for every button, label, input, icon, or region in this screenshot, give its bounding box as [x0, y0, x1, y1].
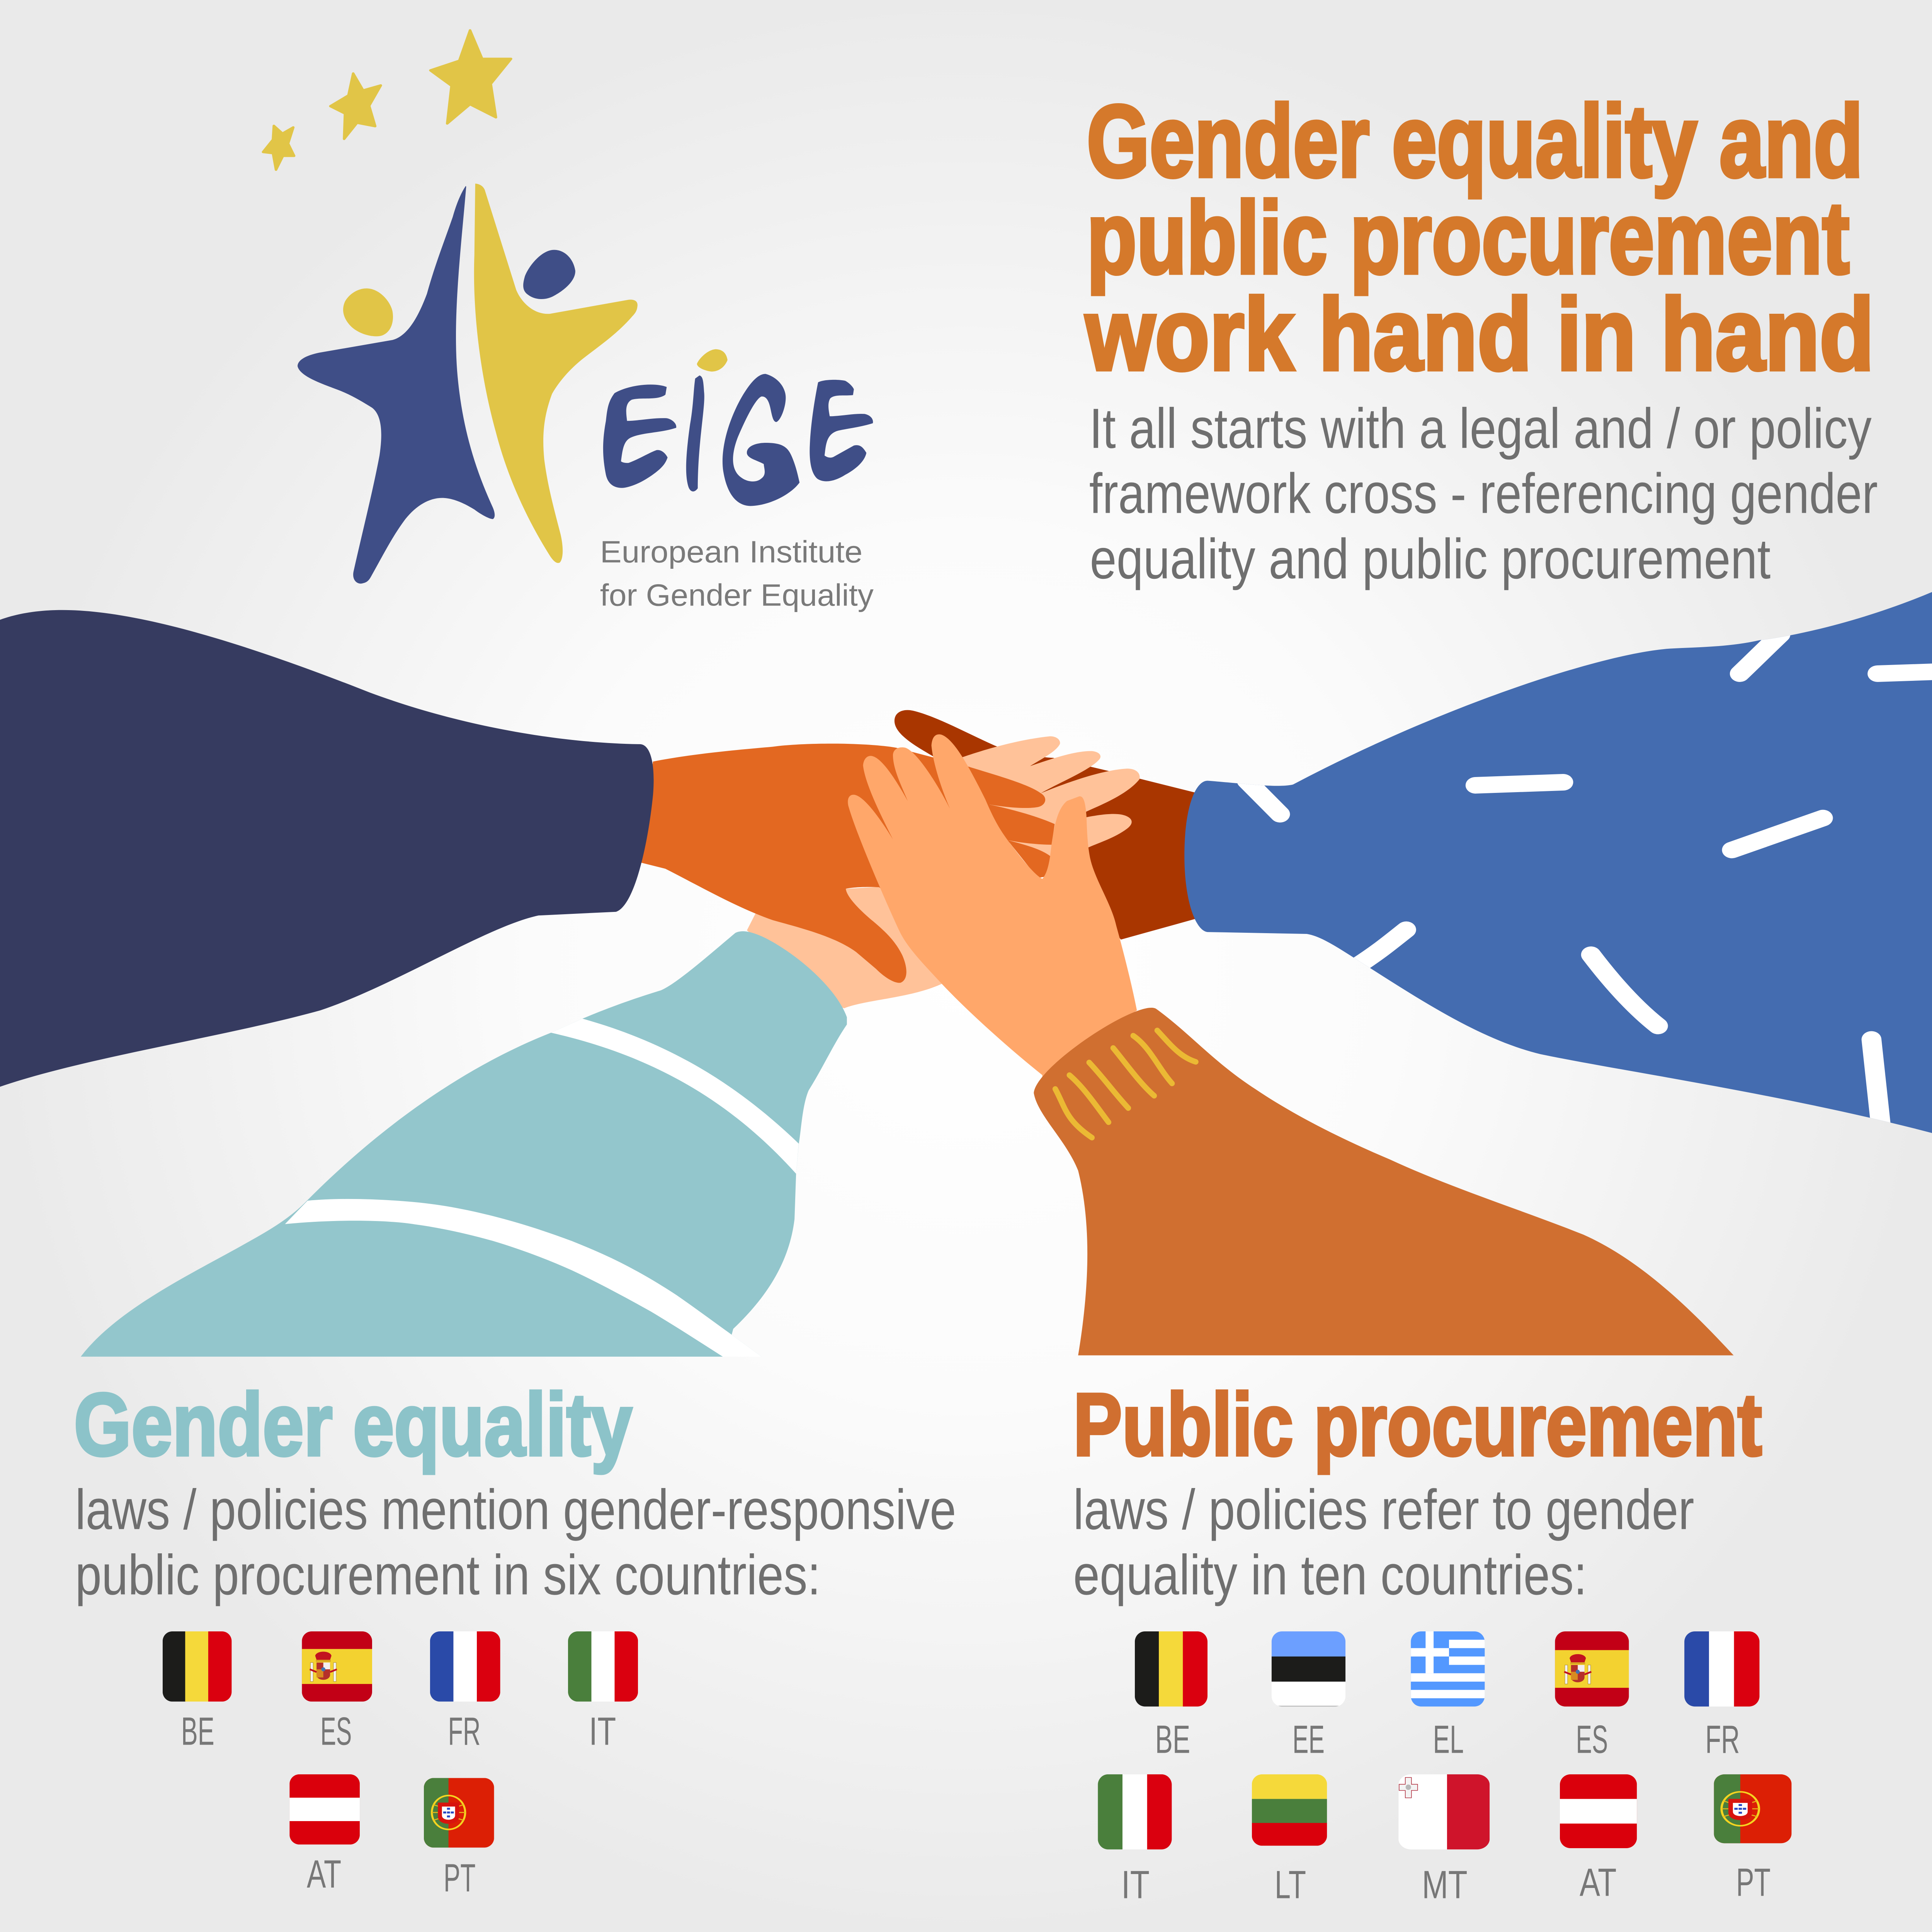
illustration: joined hands [0, 592, 1932, 1357]
logo: EIGE [263, 30, 874, 612]
flag: BE [1135, 1631, 1208, 1761]
text block: public procurement: laws / policies refer to gender [1073, 1478, 1694, 1541]
flag: FR [1684, 1631, 1760, 1761]
flag: EE: EE [1293, 1717, 1325, 1761]
title [1084, 84, 1874, 392]
flag: LT: LT [1275, 1863, 1306, 1907]
flag: IT [1098, 1774, 1172, 1907]
flag: MT: MT [1422, 1863, 1468, 1907]
logo caption [600, 535, 874, 612]
sleeve: blue [1184, 592, 1932, 1133]
logo caption: European Institute [600, 535, 862, 569]
icon: EIGE lettering [603, 349, 873, 506]
panel: public procurement [1073, 1375, 1791, 1907]
flag: ES: ES [320, 1709, 352, 1753]
icon: three stars [263, 30, 511, 170]
heading: gender equality: Gender equality [74, 1375, 632, 1474]
logo caption: for Gender Equality [600, 578, 874, 612]
sleeve: teal [81, 931, 847, 1357]
icon: EIGE figures [298, 184, 638, 583]
heading: public procurement: Public procurement [1073, 1375, 1762, 1474]
sleeve: brown-orange [1034, 1008, 1734, 1355]
flag: EE [1272, 1631, 1345, 1761]
text block: gender equality: laws / policies mention gender-responsive [75, 1478, 956, 1541]
flag: PT: PT [444, 1856, 476, 1900]
text block: gender equality: public procurement in six countries: [75, 1543, 821, 1607]
flag: BE [163, 1631, 231, 1753]
flag: EL [1411, 1631, 1485, 1761]
sleeve: navy [0, 610, 654, 1087]
flag: BE: BE [1155, 1717, 1190, 1761]
flag: AT: AT [1580, 1860, 1617, 1904]
flag: FR [430, 1631, 500, 1753]
flag: PT [1714, 1774, 1791, 1904]
text block: gender equality [75, 1478, 956, 1607]
flag: IT: IT [1121, 1863, 1150, 1907]
text block: public procurement: equality in ten countries: [1073, 1543, 1587, 1607]
flag: IT [568, 1631, 638, 1753]
hand: front peach [848, 734, 1137, 1077]
flag: LT [1252, 1774, 1327, 1907]
flag: MT [1398, 1774, 1490, 1907]
cuff stitches [1055, 1031, 1196, 1138]
flag: ES: ES [1576, 1717, 1608, 1761]
hand: light peach [747, 736, 1140, 1008]
flag: AT [1560, 1774, 1637, 1904]
flag: PT [424, 1778, 494, 1900]
flag: EL: EL [1433, 1717, 1464, 1761]
flag: BE: BE [181, 1709, 214, 1753]
flag: IT: IT [589, 1709, 616, 1753]
subtitle [1089, 397, 1878, 591]
flag: ES [1555, 1631, 1629, 1761]
flag: AT [289, 1774, 360, 1896]
flag: ES [302, 1631, 372, 1753]
flag: FR: FR [448, 1709, 481, 1753]
flag: FR: FR [1705, 1717, 1740, 1761]
subtitle: equality and public procurement [1090, 527, 1770, 591]
flag: AT: AT [307, 1852, 341, 1896]
hand: orange [641, 743, 1054, 983]
hand: dark brown [895, 710, 1204, 940]
text block: public procurement [1073, 1478, 1694, 1607]
flag: PT: PT [1736, 1860, 1770, 1904]
panel: gender equality [74, 1375, 956, 1900]
